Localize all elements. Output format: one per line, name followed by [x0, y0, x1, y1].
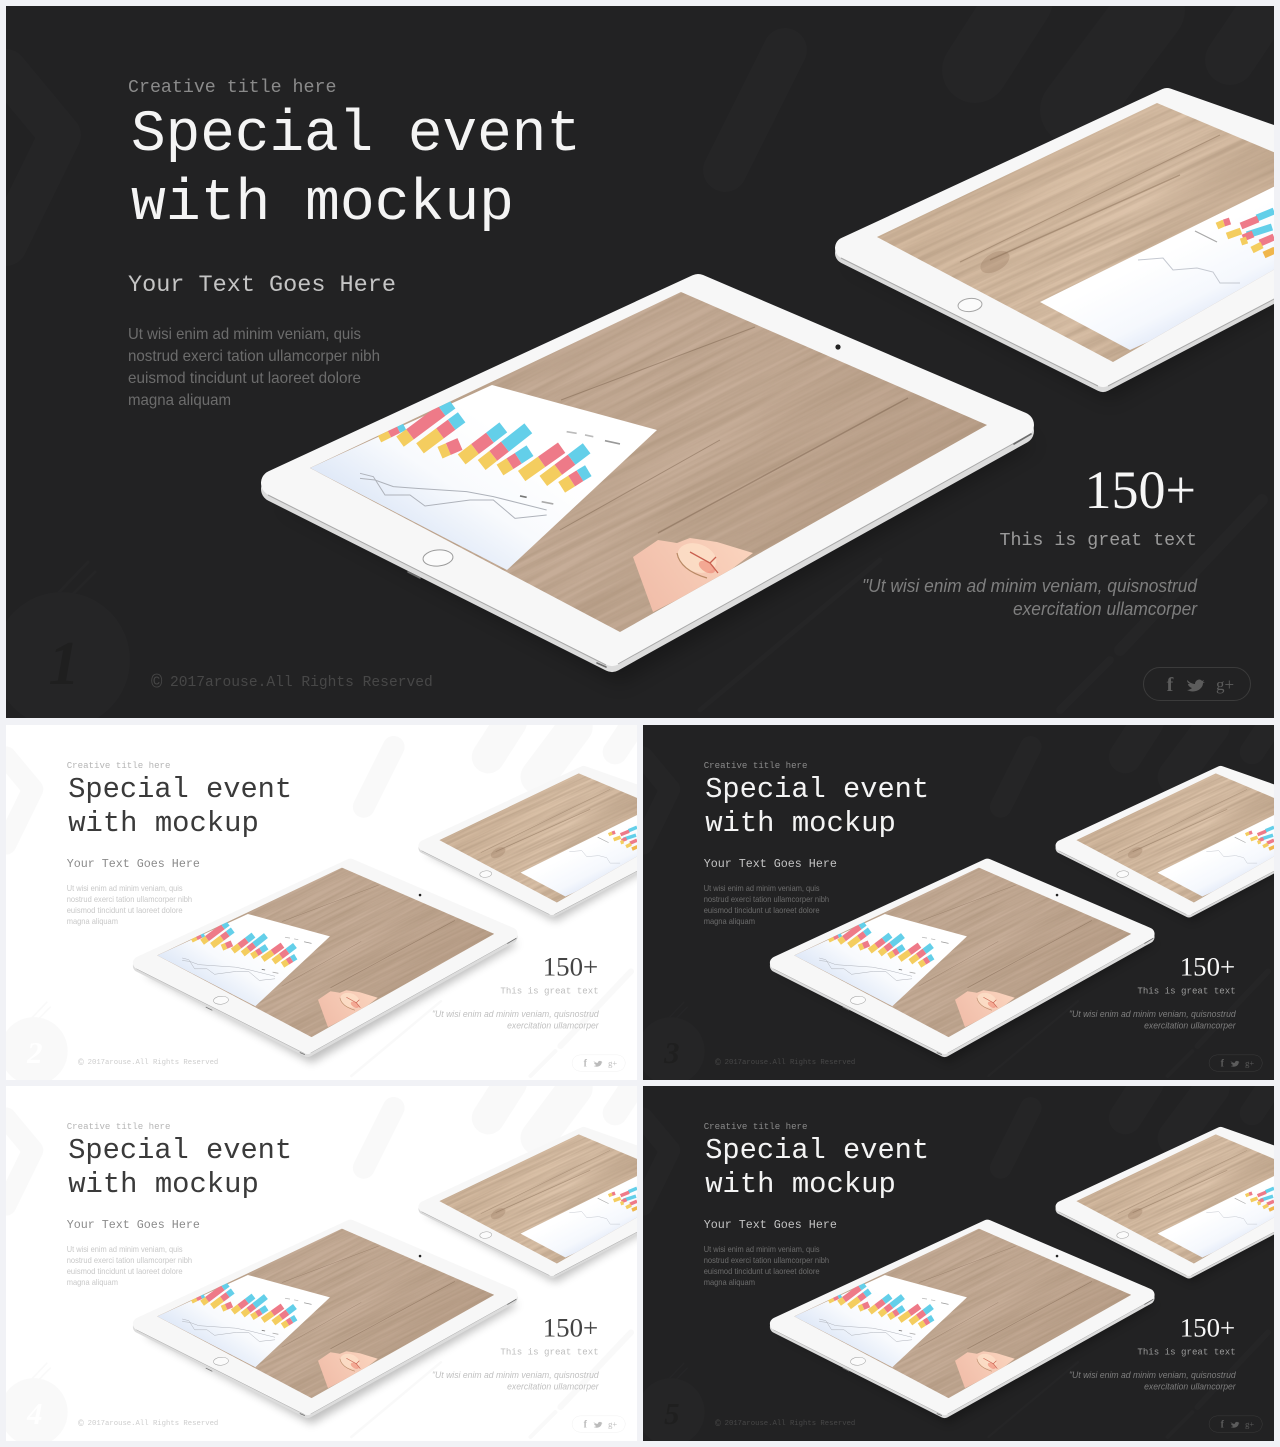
- chart sheet: [310, 385, 657, 570]
- eyebrow text: Creative title here: [704, 760, 807, 771]
- subtitle: Your Text Goes Here: [128, 272, 396, 299]
- tablet mockup: back: [1018, 1081, 1280, 1333]
- copyright: [715, 1418, 855, 1429]
- title: [705, 1134, 929, 1201]
- body text: magna aliquam: [67, 917, 118, 926]
- subtitle: Your Text Goes Here: [67, 857, 200, 871]
- title: [68, 773, 292, 840]
- quote: [1069, 1009, 1237, 1031]
- quote: "Ut wisi enim ad minim veniam, quisnostrud: [432, 1370, 600, 1380]
- social icons: f: [1221, 1420, 1225, 1431]
- line chart on sheet: [360, 473, 547, 518]
- body text: euismod tincidunt ut laoreet dolore: [67, 906, 183, 915]
- body text: nostrud exerci tation ullamcorper nibh: [704, 1256, 829, 1265]
- background slide number: 1: [48, 630, 80, 698]
- social icons: g+: [1245, 1058, 1254, 1068]
- panel: dark slide 5: [643, 1086, 1274, 1441]
- panel: light slide 2: [6, 725, 637, 1080]
- quote: exercitation ullamcorper: [1144, 1021, 1237, 1031]
- body text: Ut wisi enim ad minim veniam, quis: [128, 326, 361, 343]
- copyright: ©: [78, 1057, 84, 1068]
- copyright: ©: [715, 1057, 721, 1068]
- subtitle: Your Text Goes Here: [67, 1218, 200, 1232]
- eyebrow text: Creative title here: [67, 760, 170, 771]
- tablet mockup: back: [381, 720, 725, 972]
- title: Special event: [131, 103, 581, 168]
- camera: [835, 344, 841, 350]
- body text: [704, 1245, 829, 1287]
- tablet edge line: [268, 436, 1027, 665]
- quote: [1069, 1370, 1237, 1392]
- body text: [704, 884, 829, 926]
- body text: magna aliquam: [704, 1278, 755, 1287]
- copyright: ©: [78, 1418, 84, 1429]
- body text: euismod tincidunt ut laoreet dolore: [67, 1267, 183, 1276]
- body text: nostrud exerci tation ullamcorper nibh: [704, 895, 829, 904]
- statistic caption: This is great text: [500, 986, 599, 997]
- quote: "Ut wisi enim ad minim veniam, quisnostrud: [432, 1009, 600, 1019]
- background decorative shapes: [0, 1083, 635, 1446]
- statistic: 150+: [1085, 460, 1196, 520]
- social icons: f: [584, 1420, 588, 1431]
- subtitle: Your Text Goes Here: [704, 857, 837, 871]
- copyright: 2017arouse.All Rights Reserved: [88, 1059, 218, 1067]
- tablet mockup: front: [102, 774, 556, 1137]
- copyright: [78, 1418, 218, 1429]
- statistic: 150+: [1180, 951, 1235, 981]
- statistic caption: This is great text: [1000, 531, 1197, 551]
- title: with mockup: [131, 172, 514, 237]
- title: with mockup: [705, 1168, 896, 1201]
- copyright: [78, 1057, 218, 1068]
- social icons: g+: [608, 1419, 617, 1429]
- statistic: 150+: [543, 1312, 598, 1342]
- eyebrow text: Creative title here: [128, 78, 336, 98]
- background decorative shapes: [0, 722, 635, 1085]
- copyright: ©: [151, 672, 163, 694]
- social icons: g+: [608, 1058, 617, 1068]
- social icons: [572, 1416, 625, 1432]
- quote: [432, 1009, 600, 1031]
- background decorative shapes: [637, 722, 1272, 1085]
- title: [705, 773, 929, 840]
- quote: exercitation ullamcorper: [507, 1021, 600, 1031]
- quote: exercitation ullamcorper: [1144, 1382, 1237, 1392]
- fist photo detail: [633, 538, 753, 612]
- quote: [862, 576, 1198, 619]
- quote: "Ut wisi enim ad minim veniam, quisnostrud: [1069, 1370, 1237, 1380]
- title: Special event: [705, 773, 929, 806]
- statistic: 150+: [1180, 1312, 1235, 1342]
- background slide number: 4: [26, 1396, 43, 1431]
- home button: [957, 297, 983, 313]
- social icons: g+: [1245, 1419, 1254, 1429]
- tablet screen: wood and chart sheet: [198, 105, 1111, 833]
- statistic caption: This is great text: [500, 1347, 599, 1358]
- body text: nostrud exerci tation ullamcorper nibh: [67, 1256, 192, 1265]
- social icons: g+: [1216, 675, 1234, 694]
- statistic caption: This is great text: [1137, 986, 1236, 997]
- panel: light slide 4: [6, 1086, 637, 1441]
- eyebrow text: Creative title here: [704, 1121, 807, 1132]
- title: Special event: [68, 773, 292, 806]
- tablet body: [274, 287, 1021, 653]
- body text: nostrud exerci tation ullamcorper nibh: [128, 348, 380, 365]
- social icons: [1209, 1416, 1262, 1432]
- body text: magna aliquam: [704, 917, 755, 926]
- social icons: [572, 1055, 625, 1071]
- body text: magna aliquam: [67, 1278, 118, 1287]
- title: Special event: [68, 1134, 292, 1167]
- copyright: [715, 1057, 855, 1068]
- body text: magna aliquam: [128, 392, 231, 409]
- copyright: 2017arouse.All Rights Reserved: [88, 1420, 218, 1428]
- copyright: 2017arouse.All Rights Reserved: [170, 675, 433, 691]
- copyright: 2017arouse.All Rights Reserved: [725, 1420, 855, 1428]
- title: with mockup: [705, 807, 896, 840]
- body text: euismod tincidunt ut laoreet dolore: [704, 906, 820, 915]
- tablet edge line: [841, 207, 1280, 386]
- statistic caption: This is great text: [1137, 1347, 1236, 1358]
- tablet screen: wood and chart sheet: [759, 0, 1280, 502]
- tablet shadow: [850, 112, 1280, 400]
- tablet mockup: front: [198, 105, 1111, 833]
- title: [68, 1134, 292, 1201]
- quote: exercitation ullamcorper: [507, 1382, 600, 1392]
- tablet body: [846, 99, 1280, 376]
- background slide number: 2: [26, 1035, 43, 1070]
- body text: nostrud exerci tation ullamcorper nibh: [67, 895, 192, 904]
- body text: [67, 1245, 192, 1287]
- body text: Ut wisi enim ad minim veniam, quis: [704, 1245, 820, 1254]
- subtitle: Your Text Goes Here: [704, 1218, 837, 1232]
- body text: Ut wisi enim ad minim veniam, quis: [67, 884, 183, 893]
- copyright: 2017arouse.All Rights Reserved: [725, 1059, 855, 1067]
- panel: main dark slide: [6, 6, 1274, 718]
- background decorative shapes: [0, 0, 1270, 728]
- body text: Ut wisi enim ad minim veniam, quis: [67, 1245, 183, 1254]
- copyright: ©: [715, 1418, 721, 1429]
- title: with mockup: [68, 807, 259, 840]
- tablet mockup: front: [739, 1135, 1193, 1447]
- body text: euismod tincidunt ut laoreet dolore: [704, 1267, 820, 1276]
- quote: "Ut wisi enim ad minim veniam, quisnostrud: [1069, 1009, 1237, 1019]
- chart legends: [520, 432, 620, 504]
- tablet edge: [846, 104, 1280, 381]
- social icons: [1144, 668, 1250, 700]
- statistic: 150+: [543, 951, 598, 981]
- title: Special event: [705, 1134, 929, 1167]
- tablet mockup: back: [1018, 720, 1280, 972]
- background decorative shapes: [637, 1083, 1272, 1446]
- social icons: [1209, 1055, 1262, 1071]
- tablet corner highlights: [408, 434, 1031, 667]
- body text: euismod tincidunt ut laoreet dolore: [128, 370, 361, 387]
- quote: [432, 1370, 600, 1392]
- social icons: f: [1221, 1059, 1225, 1070]
- copyright: [151, 672, 433, 694]
- body text: [67, 884, 192, 926]
- quote: "Ut wisi enim ad minim veniam, quisnostrud: [862, 576, 1198, 596]
- tablet shadow: [285, 300, 1035, 684]
- title: with mockup: [68, 1168, 259, 1201]
- eyebrow text: Creative title here: [67, 1121, 170, 1132]
- body text: [128, 326, 380, 409]
- tablet mockup: back: [759, 0, 1280, 502]
- tablet mockup: front: [102, 1135, 556, 1447]
- home button: [422, 549, 454, 567]
- tablet mockup: back: [381, 1081, 725, 1333]
- body text: Ut wisi enim ad minim veniam, quis: [704, 884, 820, 893]
- background slide number: 5: [664, 1396, 680, 1431]
- tablet edge: [274, 293, 1021, 659]
- tablet mockup: front: [739, 774, 1193, 1137]
- background slide number: 3: [663, 1035, 680, 1070]
- bar chart on sheet: [378, 403, 588, 487]
- panel: dark slide 3: [643, 725, 1274, 1080]
- title: [131, 103, 581, 237]
- social icons: f: [584, 1059, 588, 1070]
- quote: exercitation ullamcorper: [1013, 599, 1198, 619]
- social icons: f: [1167, 674, 1174, 696]
